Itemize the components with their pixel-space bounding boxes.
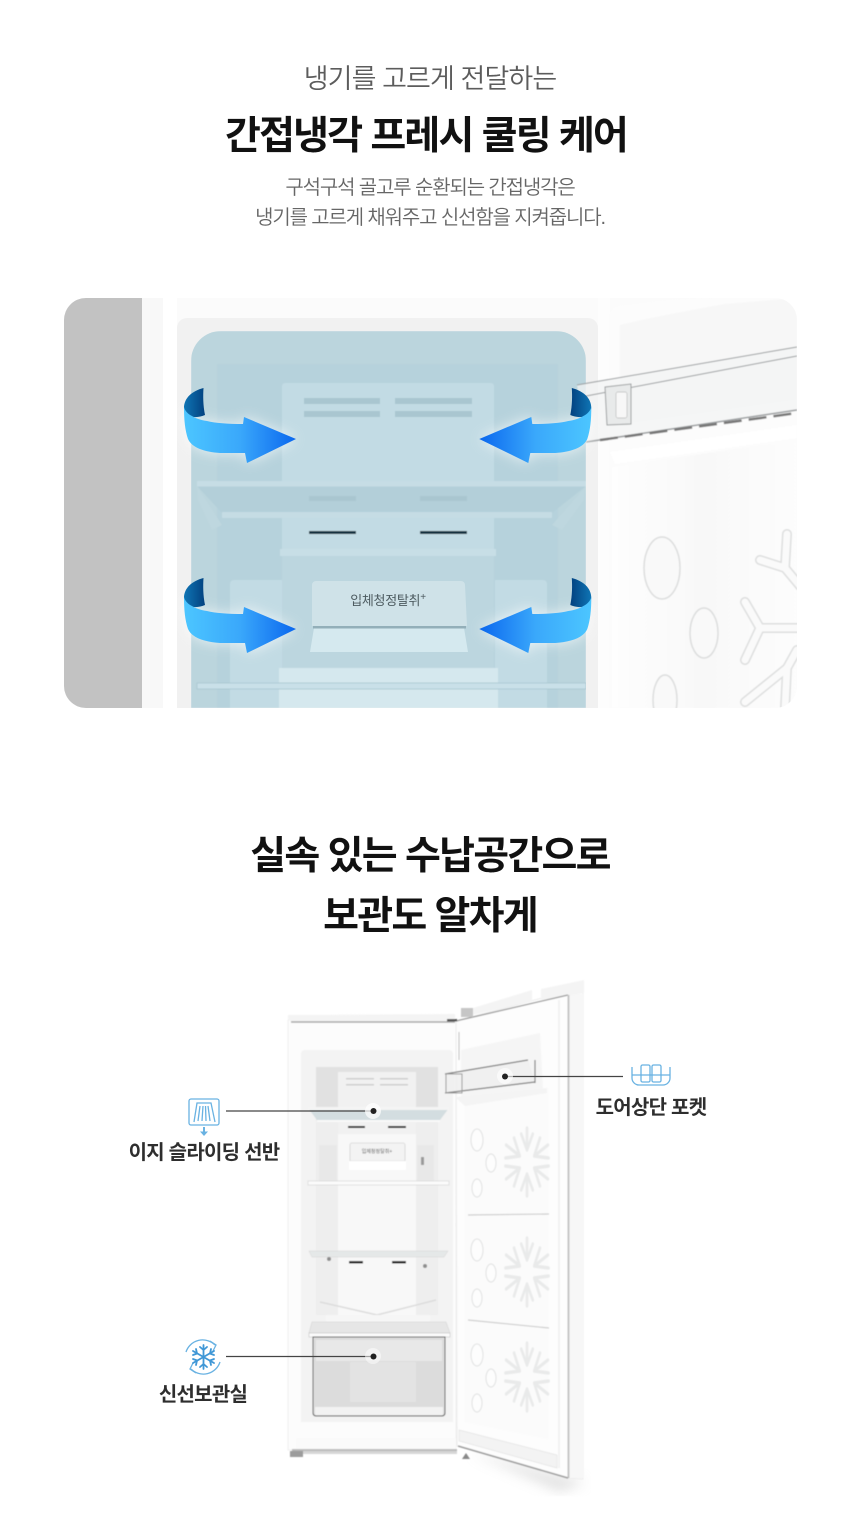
title: 간접냉각 프레시 쿨링 케어	[225, 115, 627, 158]
cabinet frame	[177, 318, 598, 708]
door embossing 1	[471, 1128, 549, 1197]
door hinge side edge	[568, 995, 570, 1478]
door pocket	[445, 1060, 535, 1093]
airflow arrows	[184, 388, 591, 653]
shelf 2	[308, 1181, 449, 1185]
door liner	[465, 1088, 548, 1439]
label: door pocket: 도어상단 포켓	[596, 1096, 707, 1119]
lower shelf	[309, 1322, 450, 1333]
shelf slots	[309, 531, 356, 534]
shelf 1	[308, 1108, 449, 1120]
door liner	[612, 440, 797, 708]
callout: easy sliding shelf	[189, 1099, 381, 1136]
feet	[290, 1451, 303, 1457]
heading: storage	[250, 835, 610, 938]
icon: sliding shelf	[189, 1099, 219, 1136]
blue cooling zone	[191, 331, 586, 708]
heading: storage: 실속 있는 수납공간으로	[250, 835, 610, 878]
rear wall	[217, 364, 558, 708]
arrow: top right	[479, 388, 591, 463]
door pocket	[576, 384, 586, 396]
door bottom	[459, 1430, 557, 1468]
lower rear panel	[282, 556, 494, 708]
door embossed snowflake	[745, 534, 800, 708]
shelf 3	[309, 1251, 448, 1257]
air filter module	[310, 581, 468, 652]
lower shelf	[197, 683, 586, 689]
door top caps	[473, 980, 584, 1015]
leader line	[226, 1110, 373, 1112]
door embossing 2	[471, 1238, 549, 1307]
air filter module: 입체청정탈취	[350, 593, 420, 608]
rear wall center column	[338, 1134, 416, 1324]
ledge	[280, 549, 496, 556]
cabinet top cap	[288, 1014, 455, 1022]
bottom light area	[279, 668, 498, 708]
fresh drawer	[313, 1337, 445, 1416]
arrow: bottom left	[184, 578, 296, 653]
arrow: top left	[184, 388, 296, 463]
upper shelf	[282, 486, 494, 512]
door embossed ovals	[644, 537, 718, 725]
description: 구석구석 골고루 순환되는 간접냉각은	[285, 177, 575, 199]
leader line	[226, 1356, 373, 1358]
leader line	[505, 1076, 623, 1078]
callout: fresh compartment	[186, 1340, 381, 1374]
cabinet edge strip	[142, 298, 163, 708]
pocket bracket	[605, 384, 631, 425]
panel: fridge interior with airflow arrows	[64, 298, 797, 708]
air filter module: +	[420, 592, 426, 603]
description: 냉기를 고르게 채워주고 신선함을 지켜줍니다.	[255, 207, 605, 229]
background	[64, 298, 797, 708]
icon: door pocket	[632, 1065, 670, 1085]
cabinet body	[288, 1020, 456, 1450]
door divider lines	[468, 1214, 549, 1328]
callout: door pocket	[497, 1065, 670, 1085]
heading: storage: 보관도 알차게	[323, 894, 537, 938]
door embossing 3	[471, 1343, 549, 1412]
fridge illustration with callouts: 입체청정탈취+	[362, 1148, 392, 1155]
arrow: bottom right	[479, 578, 591, 653]
slots	[348, 1126, 365, 1128]
side inserts	[319, 1145, 337, 1181]
label: fresh compartment: 신선보관실	[159, 1383, 247, 1406]
rear chevron	[320, 1300, 436, 1315]
cabinet base	[296, 1438, 456, 1450]
icon: snowflake cycle	[186, 1340, 220, 1374]
rear wall upper	[316, 1067, 438, 1137]
subtitle: 냉기를 고르게 전달하는	[304, 64, 556, 94]
vents	[304, 398, 472, 417]
filter module	[350, 1143, 405, 1161]
side blocks	[230, 580, 282, 708]
upper rear panel	[282, 383, 494, 549]
floor shadow	[470, 1452, 585, 1492]
door outer	[456, 987, 583, 1479]
label: easy sliding shelf: 이지 슬라이딩 선반	[129, 1141, 280, 1164]
cavity	[301, 1050, 453, 1422]
door	[576, 346, 797, 708]
gray side wall	[64, 298, 142, 708]
description	[255, 177, 605, 229]
